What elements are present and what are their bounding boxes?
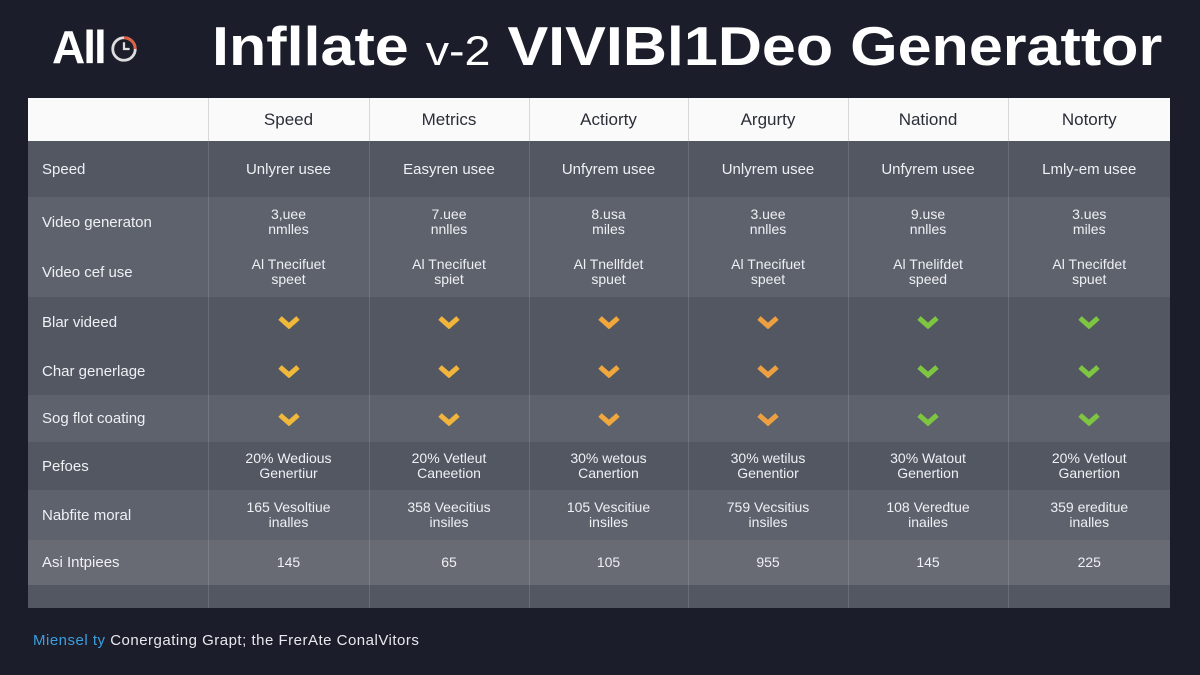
comparison table: insiles	[589, 514, 628, 530]
comparison table: 759 Vecsitius	[727, 499, 809, 515]
comparison table: 9.use	[911, 206, 945, 222]
comparison table: 105 Vescitiue	[567, 499, 650, 515]
comparison table: 3.ues	[1072, 206, 1106, 222]
comparison table: 358 Veecitius	[407, 499, 491, 515]
comparison table: spuet	[591, 271, 626, 287]
comparison table: Al Tnecifuet	[731, 256, 805, 272]
comparison table: 20% Vetleut	[412, 450, 486, 466]
comparison table: inalles	[269, 514, 308, 530]
comparison table: 955	[756, 554, 780, 570]
comparison table: Genentior	[737, 465, 799, 481]
comparison table: Argurty	[741, 110, 795, 129]
comparison table: Sog flot coating	[42, 410, 145, 427]
comparison table: Canertion	[578, 465, 639, 481]
comparison table: spuet	[1072, 271, 1106, 287]
comparison table: Metrics	[422, 110, 476, 129]
comparison table: 165 Vesoltiue	[246, 499, 331, 515]
comparison table: Asi Intpiees	[42, 554, 120, 571]
comparison table: 20% Vetlout	[1052, 450, 1127, 466]
comparison table: spiet	[434, 271, 464, 287]
comparison table: 145	[916, 554, 940, 570]
comparison table: 7.uee	[431, 206, 467, 222]
comparison table: 145	[277, 554, 300, 570]
comparison table: Al Tnecifdet	[1052, 256, 1126, 272]
comparison table: 108 Veredtue	[886, 499, 970, 515]
comparison table: Al Tnecifuet	[412, 256, 486, 272]
comparison table: Al Tnecifuet	[252, 256, 325, 272]
comparison table: Lmly-em usee	[1042, 160, 1136, 178]
comparison table: Genertion	[897, 465, 959, 481]
comparison table: Nationd	[899, 110, 957, 129]
comparison table: Genertiur	[259, 465, 318, 481]
comparison table: Unfyrem usee	[881, 160, 975, 178]
comparison table: speet	[271, 271, 306, 287]
comparison table: 65	[441, 554, 457, 570]
comparison table: 359 ereditue	[1050, 499, 1128, 515]
comparison table: nnlles	[750, 221, 786, 237]
comparison table: 3.uee	[750, 206, 786, 222]
comparison table: Unlyrem usee	[722, 160, 814, 178]
comparison table: Char generlage	[42, 362, 145, 380]
comparison table: 225	[1078, 554, 1101, 570]
comparison table: 30% Watout	[890, 450, 966, 466]
comparison table: inalles	[1069, 514, 1109, 530]
comparison table: Blar videed	[42, 314, 117, 330]
title	[52, 15, 1162, 77]
comparison table: Al Tnelifdet	[893, 256, 963, 272]
comparison table: Video cef use	[42, 264, 133, 280]
comparison table: 105	[597, 554, 620, 570]
comparison table: Unfyrem usee	[562, 160, 655, 178]
comparison table: Notorty	[1062, 110, 1117, 129]
logo: All	[52, 21, 105, 73]
comparison table: Actiorty	[580, 110, 637, 129]
comparison table: 30% wetous	[570, 450, 647, 466]
footer caption: Miensel ty Conergating Grapt; the FrerAte ConalVitors	[33, 632, 419, 649]
comparison table: 8.usa	[591, 206, 626, 222]
comparison table: Unlyrer usee	[246, 160, 331, 178]
comparison table: speed	[909, 271, 947, 287]
comparison table: insiles	[749, 514, 787, 530]
comparison table: 3,uee	[271, 206, 306, 222]
comparison table: Caneetion	[417, 465, 481, 481]
comparison table: Pefoes	[42, 458, 89, 474]
comparison table: miles	[592, 221, 625, 237]
comparison table: nmlles	[268, 221, 309, 237]
comparison table: 30% wetilus	[731, 450, 805, 466]
comparison table: Nabfite moral	[42, 506, 131, 524]
comparison table: nnlles	[910, 221, 946, 237]
comparison table: Video generaton	[42, 214, 152, 230]
comparison table: Speed	[264, 110, 313, 129]
comparison table: speet	[751, 271, 785, 287]
comparison table: 20% Wedious	[245, 450, 332, 466]
comparison table: Easyren usee	[403, 160, 495, 178]
heading text: Infllate v-2 VIVIBl1Deo Generattor	[212, 15, 1162, 77]
comparison table: nnlles	[431, 221, 467, 237]
comparison table: Speed	[42, 160, 85, 178]
comparison table: Al Tnellfdet	[574, 256, 643, 272]
comparison table	[28, 98, 1170, 608]
comparison table: Ganertion	[1058, 465, 1120, 481]
comparison table: insiles	[430, 514, 468, 530]
comparison table: inailes	[908, 514, 948, 530]
logo	[52, 21, 137, 73]
comparison table: miles	[1073, 221, 1106, 237]
